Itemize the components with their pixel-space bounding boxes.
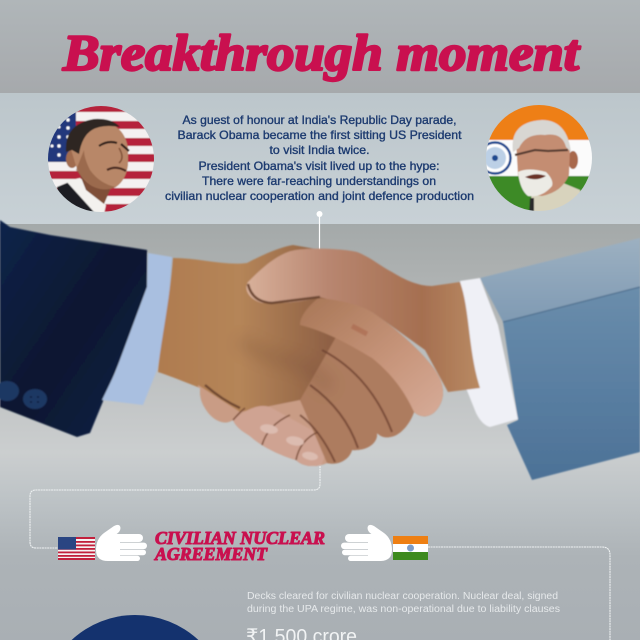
portrait: Narendra Modi on Indian flag — [486, 105, 592, 211]
intro text: civilian nuclear cooperation and joint defence production — [165, 189, 474, 203]
right jacket sleeve — [480, 238, 640, 480]
connector: handshake to US flag — [30, 440, 320, 548]
right hand — [246, 249, 480, 392]
top finger — [300, 298, 443, 416]
icon: left white hand — [96, 525, 147, 561]
right shirt cuff — [460, 278, 518, 427]
connector: India flag to body text — [428, 547, 610, 640]
icon: right white hand — [341, 525, 392, 561]
circle: navy panel — [72, 615, 198, 640]
body text: nuclear deal: Decks cleared for civilian nuclear cooperation. Nuclear deal, signed — [247, 591, 558, 602]
background: title band — [0, 0, 640, 93]
intro text: President Obama's visit lived up to the hype: — [198, 159, 440, 173]
heading: civilian nuclear agreement: CIVILIAN NUCLEAR — [155, 528, 325, 548]
heading: civilian nuclear agreement: AGREEMENT — [154, 544, 268, 564]
background: lower section — [0, 224, 640, 640]
lower fingers — [198, 385, 328, 465]
image: handshake — [0, 220, 640, 480]
intro text — [165, 113, 474, 203]
flag: USA — [58, 537, 95, 560]
fingernails — [259, 423, 319, 461]
left hand and interlocked fingers — [150, 240, 450, 475]
heading: civilian nuclear agreement — [154, 528, 325, 564]
connector: top dot and stem — [316, 211, 322, 250]
intro text: Barack Obama became the first sitting US President — [178, 128, 462, 142]
flag: India — [393, 536, 428, 560]
portrait: Barack Obama on US flag — [46, 104, 156, 214]
intro text: There were far-reaching understandings on — [202, 174, 436, 188]
body text: nuclear deal: during the UPA regime, was non-operational due to liability clauses — [247, 604, 560, 615]
intro text: As guest of honour at India's Republic Day parade, — [182, 113, 456, 127]
background: intro band — [0, 93, 640, 224]
left jacket sleeve — [0, 220, 147, 437]
body text: nuclear deal — [247, 591, 560, 615]
intro text: to visit India twice. — [270, 143, 370, 157]
title: Breakthrough moment — [62, 26, 581, 82]
left shirt cuff — [102, 253, 172, 405]
